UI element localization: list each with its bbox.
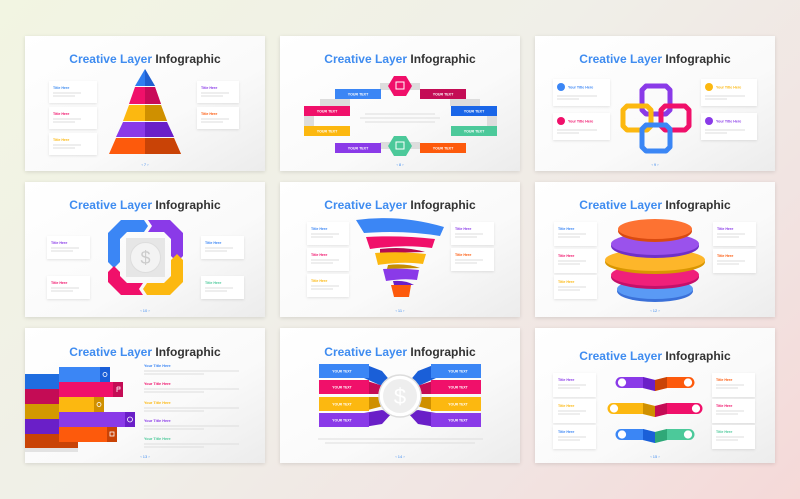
- pyramid: [109, 69, 181, 154]
- panel: slide 7 pyramid: Title Here: [53, 86, 69, 90]
- chain links: [623, 86, 689, 151]
- panel: slide 14 bowtie: [280, 328, 520, 463]
- panel: slide 11 funnel: Title Here: [311, 253, 327, 257]
- text list: Your Title Here: [144, 382, 171, 386]
- panel: slide 7 pyramid: Title Here: [53, 112, 69, 116]
- banners: YOUR TEXT: [433, 92, 454, 96]
- stacked discs: [605, 219, 705, 302]
- banners: YOUR TEXT: [464, 130, 485, 134]
- cards: [49, 81, 239, 155]
- panel: slide 15 ribbons: Title Here: [558, 404, 574, 408]
- title: Creative Layer Infographic: [69, 198, 221, 212]
- panel: slide 10 octagon arrows: [25, 182, 265, 317]
- panel: slide 9 chain: [535, 36, 775, 171]
- panel: slide 15 ribbons: Title Here: [716, 378, 732, 382]
- panel: slide 15 ribbons: ‹ 15 ›: [650, 454, 660, 459]
- panel: slide 11 funnel: Title Here: [455, 253, 471, 257]
- front bars: [59, 367, 135, 442]
- panel: slide 15 ribbons: Title Here: [716, 404, 732, 408]
- panel: slide 11 funnel: [280, 182, 520, 317]
- panel: slide 15 ribbons: Title Here: [558, 430, 574, 434]
- wings: [364, 364, 436, 427]
- panel: slide 10 octagon arrows: Title Here: [205, 241, 221, 245]
- panel: slide 7 pyramid: [25, 36, 265, 171]
- panel: slide 12 discs: Title Here: [558, 227, 574, 231]
- center text: [360, 114, 440, 122]
- text list: [144, 364, 171, 441]
- panel: slide 15 ribbons: [535, 328, 775, 463]
- title: Creative Layer Infographic: [324, 52, 476, 66]
- text list: Your Title Here: [144, 364, 171, 368]
- panel: slide 10 octagon arrows: Title Here: [51, 281, 67, 285]
- panel: slide 13 bars: ‹ 13 ›: [140, 454, 150, 459]
- banners: YOUR TEXT: [348, 146, 369, 150]
- panel: slide 11 funnel: Title Here: [455, 227, 471, 231]
- panel: slide 15 ribbons: Title Here: [716, 430, 732, 434]
- cards: [47, 236, 244, 299]
- banners: YOUR TEXT: [317, 130, 338, 134]
- panel: slide 9 chain: ‹ 9 ›: [651, 162, 659, 167]
- banners: YOUR TEXT: [433, 146, 454, 150]
- panel: slide 8 banners: [280, 36, 520, 171]
- panel: slide 14 bowtie: ‹ 14 ›: [395, 454, 405, 459]
- title: Creative Layer Infographic: [324, 345, 476, 359]
- funnel: [356, 218, 444, 297]
- text list: Your Title Here: [144, 401, 171, 405]
- panel: slide 11 funnel: Title Here: [311, 279, 327, 283]
- panel: slide 10 octagon arrows: Title Here: [205, 281, 221, 285]
- page number: ‹ 7 ›: [141, 162, 149, 167]
- banners: [304, 89, 497, 153]
- octagon ring: [108, 220, 183, 295]
- connectors: [304, 83, 497, 149]
- title: Creative Layer Infographic: [579, 349, 731, 363]
- panel: slide 13 bars: [25, 328, 265, 463]
- center coin: [379, 375, 421, 417]
- bars: YOUR TEXT: [448, 370, 469, 374]
- center coin: $: [394, 384, 406, 409]
- banners: YOUR TEXT: [317, 110, 338, 114]
- panel: slide 12 discs: Title Here: [558, 254, 574, 258]
- banners: YOUR TEXT: [348, 92, 369, 96]
- hexagons: [388, 76, 412, 156]
- panel: slide 7 pyramid: Title Here: [201, 86, 217, 90]
- panel: slide 7 pyramid: Title Here: [201, 112, 217, 116]
- ribbons: [608, 377, 702, 443]
- title: Creative Layer Infographic: [579, 52, 731, 66]
- panel: slide 12 discs: ‹ 12 ›: [650, 308, 660, 313]
- cards: [553, 79, 757, 140]
- cards: [554, 222, 756, 299]
- panel: slide 10 octagon arrows: ‹ 10 ›: [140, 308, 150, 313]
- bars: YOUR TEXT: [448, 386, 469, 390]
- bars: [319, 364, 481, 427]
- description text: [318, 439, 483, 443]
- panel: slide 10 octagon arrows: Title Here: [51, 241, 67, 245]
- text list: Your Title Here: [144, 419, 171, 423]
- panel: slide 12 discs: Title Here: [717, 227, 733, 231]
- panel: slide 15 ribbons: Title Here: [558, 378, 574, 382]
- banners: YOUR TEXT: [464, 110, 485, 114]
- cards: [553, 373, 755, 449]
- bars: YOUR TEXT: [332, 402, 353, 406]
- panel: slide 8 banners: ‹ 8 ›: [396, 162, 404, 167]
- octagon ring: $: [140, 248, 151, 268]
- bars: YOUR TEXT: [332, 370, 353, 374]
- panel: slide 12 discs: Title Here: [717, 254, 733, 258]
- panel: slide 7 pyramid: Title Here: [53, 138, 69, 142]
- panel: slide 11 funnel: Title Here: [311, 227, 327, 231]
- panel: slide 12 discs: Title Here: [558, 280, 574, 284]
- bars: YOUR TEXT: [332, 418, 353, 422]
- panel: slide 12 discs: [535, 182, 775, 317]
- panel: slide 9 chain: Your Title Here: [568, 86, 593, 90]
- title: Creative Layer Infographic: [69, 345, 221, 359]
- panel: slide 9 chain: Your Title Here: [568, 120, 593, 124]
- title: Creative Layer Infographic: [324, 198, 476, 212]
- title: Creative Layer Infographic: [579, 198, 731, 212]
- bars: YOUR TEXT: [332, 386, 353, 390]
- title: Creative Layer Infographic: [69, 52, 221, 66]
- panel: slide 11 funnel: ‹ 11 ›: [395, 308, 405, 313]
- panel: slide 9 chain: Your Title Here: [716, 86, 741, 90]
- bars: YOUR TEXT: [448, 402, 469, 406]
- bars: YOUR TEXT: [448, 418, 469, 422]
- text list: Your Title Here: [144, 437, 171, 441]
- back stack: [25, 374, 78, 452]
- panel: slide 9 chain: Your Title Here: [716, 120, 741, 124]
- cards: [307, 222, 494, 297]
